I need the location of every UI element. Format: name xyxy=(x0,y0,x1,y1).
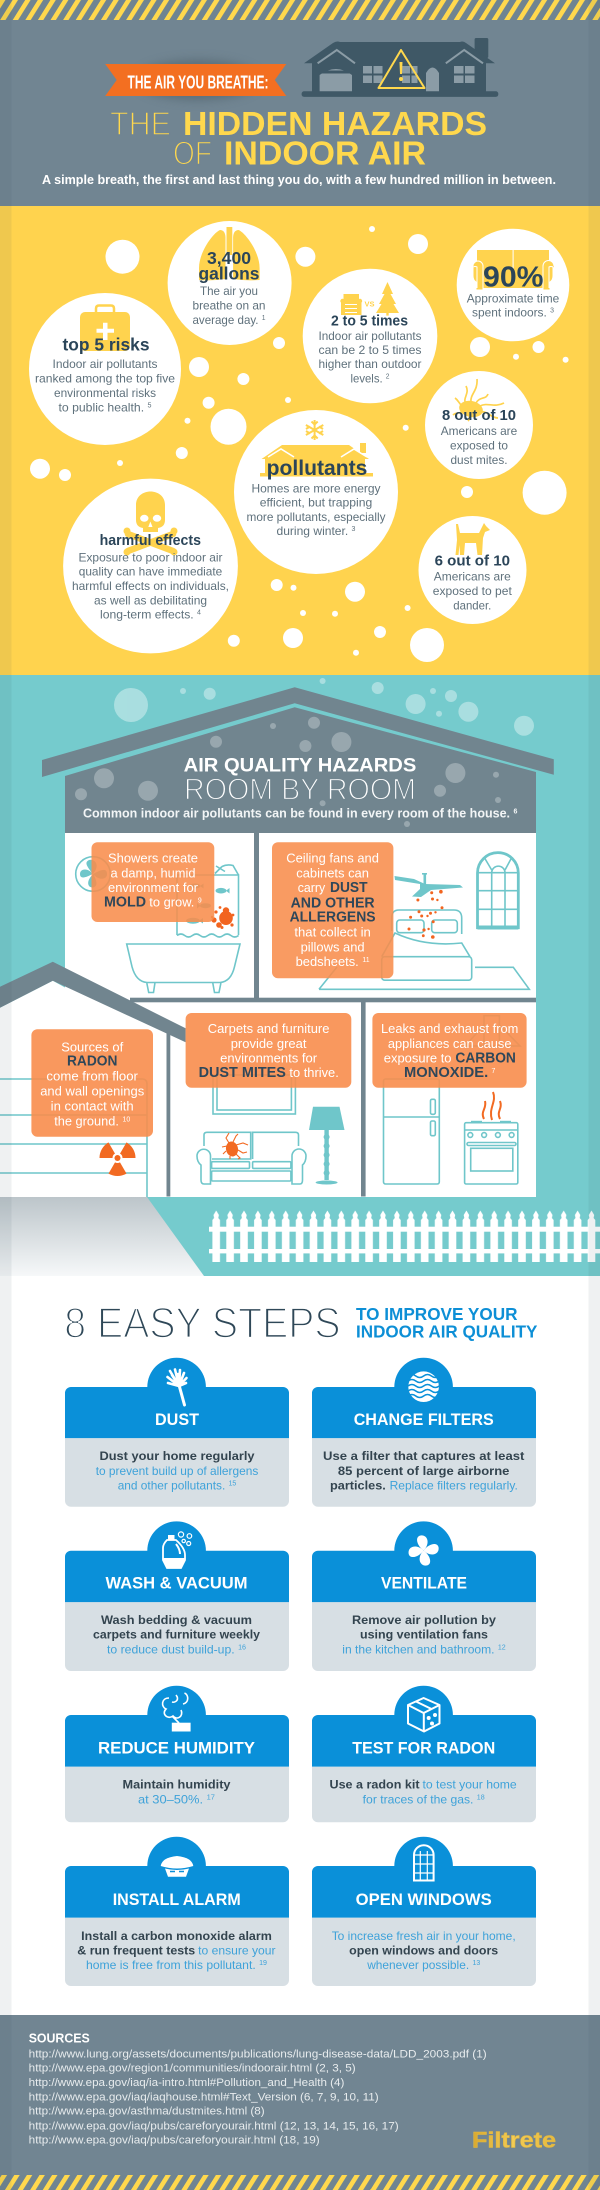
callout: mold: Showers create xyxy=(108,850,198,865)
card: ventilate: Remove air pollution by xyxy=(352,1613,496,1627)
stat: top 5 risks: top 5 risks xyxy=(62,335,150,355)
stat: 90% xyxy=(457,229,569,341)
card: change filters: 85 percent of large airborne xyxy=(338,1464,510,1478)
panel: 8 easy steps xyxy=(0,1276,600,2015)
stat: 3,400 gallons: breathe on an xyxy=(192,298,266,312)
icon: humidifier steam xyxy=(163,1693,191,1732)
callout: radon: and wall openings xyxy=(40,1084,145,1099)
callout: dust mites: DUST MITES xyxy=(199,1065,286,1081)
callout: dust and other allergens: 11 xyxy=(362,957,370,964)
card: install alarm: & run frequent tests xyxy=(77,1943,196,1957)
stat: top 5 risks: ranked among the top five xyxy=(35,372,175,386)
callout: radon: 10 xyxy=(123,1116,130,1123)
stat: 8 out of 10 dust mites xyxy=(425,371,533,479)
card: ventilate: in the kitchen and bathroom. xyxy=(342,1642,494,1656)
stat: pollutants: 3 xyxy=(352,526,356,533)
ribbon: the air you breathe xyxy=(105,60,286,100)
icon: floor lamp xyxy=(309,1107,344,1184)
stat: top 5 risks xyxy=(29,293,181,445)
hazard stripes top xyxy=(0,0,600,20)
card: ventilate: 12 xyxy=(498,1644,506,1651)
card: open windows xyxy=(312,1837,536,1986)
heading: 8 easy steps xyxy=(64,1299,538,1347)
icon: mold xyxy=(211,906,234,929)
icon: detergent bottle xyxy=(163,1532,192,1568)
hazard stripes bottom xyxy=(0,2175,600,2190)
sources list xyxy=(29,2031,487,2147)
stat: 8 out of 10 dust mites: Americans are xyxy=(441,424,518,438)
heading: room by room: ROOM BY ROOM xyxy=(184,771,416,806)
stat: 6 out of 10 pet dander: Americans are xyxy=(434,570,511,584)
stat: top 5 risks: Indoor air pollutants xyxy=(52,357,158,371)
icon: arched window xyxy=(477,853,518,928)
icon: fan xyxy=(409,1535,439,1566)
stat: pollutants: Homes are more energy xyxy=(252,481,380,495)
card: wash and vacuum: Wash bedding & vacuum xyxy=(101,1613,252,1627)
floating bubbles xyxy=(30,226,569,662)
card: open windows: To increase fresh air in your home, xyxy=(332,1929,516,1943)
icon: stove xyxy=(465,1121,518,1184)
callout: carbon monoxide: Leaks and exhaust from xyxy=(381,1021,518,1036)
stat: 3,400 gallons: 1 xyxy=(262,315,266,322)
callout: radon: RADON xyxy=(67,1054,117,1070)
callout: dust mites: to thrive. xyxy=(289,1065,339,1080)
icon: air filter xyxy=(408,1371,439,1402)
driveway xyxy=(0,1197,204,1276)
icon: smoke alarm xyxy=(161,1856,193,1877)
stat: harmful effects: harmful effects on individuals, xyxy=(72,579,229,593)
stat: 2 to 5 times: 2 xyxy=(386,374,390,381)
panel: room by room xyxy=(0,675,600,1276)
card: reduce humidity xyxy=(65,1686,289,1822)
gable bubbles xyxy=(75,717,501,827)
subtitle: A simple breath, the first and last thing you do, with a few hundred million in between. xyxy=(42,172,556,187)
stat: top 5 risks: to public health. xyxy=(58,401,143,415)
house gable xyxy=(65,707,536,834)
logo: Filtrete: Filtrete xyxy=(472,2127,556,2152)
stat: pollutants: pollutants xyxy=(267,457,367,480)
icon: wall fan xyxy=(76,857,110,891)
stat: 90%: 3 xyxy=(550,308,554,315)
callout: carbon monoxide: 7 xyxy=(492,1068,496,1075)
card: reduce humidity: 17 xyxy=(207,1794,215,1801)
card: test for radon: to test your home xyxy=(422,1777,517,1791)
card: install alarm: Install a carbon monoxide alarm xyxy=(81,1929,272,1943)
card: dust xyxy=(65,1358,289,1507)
callout: dust and other allergens: bedsheets. xyxy=(296,954,359,969)
heading: 8 easy steps: INDOOR AIR QUALITY xyxy=(356,1322,538,1342)
callout: dust and other allergens: that collect in xyxy=(294,924,371,939)
bathroom scene xyxy=(76,857,240,992)
card: wash and vacuum: WASH & VACUUM xyxy=(106,1574,248,1593)
bedroom scene xyxy=(319,853,529,989)
stat: 90%: spent indoors. xyxy=(472,306,547,320)
stat: 3,400 gallons: 3,400 xyxy=(207,248,251,268)
callout: mold: environment for xyxy=(108,880,199,895)
callout: radon: come from floor xyxy=(46,1069,139,1084)
callout: mold: MOLD xyxy=(104,895,146,911)
callout: mold: a damp, humid xyxy=(110,865,196,880)
dust particles xyxy=(408,890,444,939)
callout: dust and other allergens: ALLERGENS xyxy=(290,910,376,926)
stat: 2 to 5 times: levels. xyxy=(350,372,385,386)
ribbon: the air you breathe: THE AIR YOU BREATHE: xyxy=(128,72,268,92)
callout: carbon monoxide: appliances can cause xyxy=(388,1036,512,1051)
stat: 6 out of 10 pet dander xyxy=(418,516,526,624)
card: install alarm: 19 xyxy=(259,1960,267,1967)
stat: 2 to 5 times xyxy=(303,269,437,403)
icon: skull and crossbones xyxy=(124,492,178,556)
stat: top 5 risks: environmental risks xyxy=(54,386,156,400)
card: install alarm: home is free from this pollutant. xyxy=(86,1958,253,1972)
card: open windows: open windows and doors xyxy=(349,1943,499,1957)
card: reduce humidity: Maintain humidity xyxy=(122,1777,231,1791)
icon: window xyxy=(414,1845,434,1880)
callout: mold: 9 xyxy=(198,898,202,905)
icon: range hood xyxy=(465,1016,520,1046)
stat: harmful effects: harmful effects xyxy=(100,533,201,549)
callout: dust and other allergens: AND OTHER xyxy=(291,895,375,911)
callout: radon: in contact with xyxy=(51,1099,134,1114)
stat: 8 out of 10 dust mites: dust mites. xyxy=(450,453,508,467)
card: install alarm xyxy=(65,1837,289,1986)
stat: harmful effects: long-term effects. xyxy=(100,607,192,621)
stat: harmful effects: Exposure to poor indoor air xyxy=(78,551,223,565)
card: wash and vacuum: to reduce dust build-up. xyxy=(107,1642,232,1656)
panel: indoor air facts xyxy=(0,206,600,675)
card: ventilate: using ventilation fans xyxy=(360,1628,488,1642)
card: install alarm: to ensure your xyxy=(198,1943,276,1957)
card: change filters: particles. xyxy=(330,1478,386,1492)
stat: 90%: Approximate time xyxy=(467,292,560,306)
stat: 2 to 5 times: 2 to 5 times xyxy=(331,313,408,330)
title: INDOOR AIR xyxy=(224,136,426,172)
callout: dust mites: provide great xyxy=(231,1036,307,1051)
callout: dust and other allergens: cabinets can xyxy=(296,865,369,880)
card: test for radon: Use a radon kit xyxy=(330,1777,420,1791)
icon: bed xyxy=(319,910,529,989)
stat: harmful effects xyxy=(63,479,238,653)
icon: sofa xyxy=(473,250,554,290)
card: dust: DUST xyxy=(155,1410,199,1429)
card: ventilate: VENTILATE xyxy=(381,1574,467,1593)
panel: sources footer xyxy=(0,2015,600,2190)
card: change filters: Use a filter that captures at least xyxy=(323,1449,524,1463)
card: test for radon: 18 xyxy=(477,1794,485,1801)
sources list: http://www.epa.gov/iaq/iaqhouse.html#Text_Version (6, 7, 9, 10, 11) xyxy=(29,2091,379,2103)
callout: dust mites: Carpets and furniture xyxy=(208,1021,329,1036)
stat: 8 out of 10 dust mites: exposed to xyxy=(450,438,508,452)
heading: room by room: AIR QUALITY HAZARDS xyxy=(184,755,416,777)
card: dust: and other pollutants. xyxy=(118,1478,226,1492)
sources list: http://www.lung.org/assets/documents/publications/lung-disease-data/LDD_2003.pdf (1) xyxy=(29,2048,487,2060)
callout: carbon monoxide: CARBON xyxy=(455,1050,516,1066)
picket fence xyxy=(209,1210,600,1262)
icon: refrigerator xyxy=(384,1079,439,1184)
card: change filters: Replace filters regularly. xyxy=(390,1478,518,1492)
stat: harmful effects: as well as debilitating xyxy=(94,593,207,607)
icon: sofa xyxy=(197,1132,306,1184)
stat: pollutants: more pollutants, especially xyxy=(246,510,386,524)
card: dust: to prevent build up of allergens xyxy=(96,1464,258,1478)
callout: radon: the ground. xyxy=(54,1113,120,1128)
card: open windows: 13 xyxy=(472,1960,480,1967)
icon: house xyxy=(260,443,373,476)
stat: top 5 risks: 5 xyxy=(148,403,152,410)
stat: pollutants: during winter. xyxy=(276,524,348,538)
card: reduce humidity: REDUCE HUMIDITY xyxy=(98,1738,255,1757)
stat: 3,400 gallons xyxy=(168,221,292,345)
house interior xyxy=(65,833,536,1197)
callout: radon xyxy=(31,1029,153,1137)
card: install alarm: INSTALL ALARM xyxy=(113,1890,241,1909)
icon: dog xyxy=(456,523,490,555)
icon: radiation xyxy=(97,1141,138,1176)
callout: carbon monoxide xyxy=(372,1013,527,1088)
callout: carbon monoxide: exposure to xyxy=(384,1050,452,1065)
callout: dust and other allergens xyxy=(272,842,393,978)
title xyxy=(110,105,487,172)
stat: 90%: 90% xyxy=(483,262,544,294)
stat: 2 to 5 times: higher than outdoor xyxy=(318,357,422,371)
sources list: http://www.epa.gov/iaq/pubs/careforyourair.html (18, 19) xyxy=(29,2135,320,2147)
callout: mold xyxy=(92,842,214,922)
callout: dust and other allergens: Ceiling fans and xyxy=(286,850,379,865)
card: wash and vacuum xyxy=(65,1521,289,1671)
living room scene xyxy=(197,1075,344,1184)
card: dust: Dust your home regularly xyxy=(100,1449,255,1463)
icon: radon test kit xyxy=(408,1698,440,1732)
icon: lungs xyxy=(199,227,260,280)
icon: chair versus tree: VS xyxy=(364,300,375,308)
kitchen scene xyxy=(384,1016,520,1184)
title: THE xyxy=(110,105,171,142)
callout: dust mites: environments for xyxy=(220,1050,318,1065)
sources list: http://www.epa.gov/region1/communities/indoorair.html (2, 3, 5) xyxy=(29,2063,356,2075)
callout: mold: to grow. xyxy=(149,895,195,910)
card: open windows: whenever possible. xyxy=(367,1958,470,1972)
stat: 3,400 gallons: The air you xyxy=(200,284,258,298)
callout: dust mites xyxy=(186,1013,351,1088)
stat: 6 out of 10 pet dander: dander. xyxy=(453,598,491,612)
sources list: http://www.epa.gov/asthma/dustmites.html (8) xyxy=(29,2106,265,2118)
stat: 2 to 5 times: can be 2 to 5 times xyxy=(318,343,422,357)
panel: header xyxy=(0,0,600,206)
heading: 8 easy steps: TO IMPROVE YOUR xyxy=(356,1304,518,1324)
icon: shower curtain xyxy=(177,865,239,937)
room walls xyxy=(130,833,536,1196)
card: change filters xyxy=(312,1358,536,1507)
callout: dust and other allergens: pillows and xyxy=(301,940,365,955)
stat: 6 out of 10 pet dander: 6 out of 10 xyxy=(435,553,510,570)
stat: 8 out of 10 dust mites: 8 out of 10 xyxy=(442,408,516,424)
icon: dust mite xyxy=(453,379,504,421)
sources list: SOURCES xyxy=(29,2031,90,2046)
icon: ceiling fan xyxy=(394,873,463,897)
title: HIDDEN HAZARDS xyxy=(183,106,487,143)
heading: room by room: Common indoor air pollutants can be found in every room of the house. xyxy=(83,806,509,820)
card: test for radon xyxy=(312,1686,536,1822)
icon: bathtub xyxy=(127,944,240,992)
stat: pollutants: efficient, but trapping xyxy=(260,496,372,510)
icon: flames xyxy=(483,1092,501,1120)
icon: first aid kit xyxy=(80,306,130,351)
stat: harmful effects: quality can have immediate xyxy=(79,565,223,579)
icon: feather duster xyxy=(168,1370,186,1405)
house roof xyxy=(42,687,554,777)
card: change filters: CHANGE FILTERS xyxy=(354,1410,494,1429)
stat: pollutants xyxy=(234,410,398,574)
stat: 3,400 gallons: average day. xyxy=(192,313,261,327)
icon: house with warning sign xyxy=(302,38,498,97)
title: OF xyxy=(173,134,212,172)
stat: 3,400 gallons: gallons xyxy=(198,263,260,283)
sources list: http://www.epa.gov/iaq/ia-intro.html#Pollution_and_Health (4) xyxy=(29,2077,344,2089)
callout: dust and other allergens: carry xyxy=(298,880,326,895)
sources list: http://www.epa.gov/iaq/pubs/careforyourair.html (12, 13, 14, 15, 16, 17) xyxy=(29,2120,399,2132)
heading: room by room: 6 xyxy=(513,808,517,815)
heading: 8 easy steps: 8 EASY STEPS xyxy=(64,1299,341,1347)
heading: room by room xyxy=(83,755,517,820)
card: wash and vacuum: carpets and furniture weekly xyxy=(93,1628,260,1642)
stat: harmful effects: 4 xyxy=(197,609,201,616)
icon: orange mite xyxy=(222,1133,248,1159)
icon: snowflake xyxy=(306,420,323,440)
card: test for radon: for traces of the gas. xyxy=(363,1792,472,1806)
callout: carbon monoxide: MONOXIDE. xyxy=(404,1065,488,1081)
garage xyxy=(0,962,186,1197)
callout: dust and other allergens: DUST xyxy=(330,880,368,896)
icon: picture frame xyxy=(213,1075,295,1114)
card: wash and vacuum: 16 xyxy=(238,1644,246,1651)
callout: radon: Sources of xyxy=(61,1039,124,1054)
stat: 2 to 5 times: Indoor air pollutants xyxy=(318,329,422,343)
card: test for radon: TEST FOR RADON xyxy=(352,1738,495,1757)
card: dust: 15 xyxy=(229,1480,236,1487)
stat: 6 out of 10 pet dander: exposed to pet xyxy=(433,584,512,598)
teal sky bubbles xyxy=(114,678,534,736)
card: reduce humidity: at 30–50%. xyxy=(138,1792,199,1806)
card: ventilate xyxy=(312,1521,536,1671)
card: open windows: OPEN WINDOWS xyxy=(356,1890,492,1909)
